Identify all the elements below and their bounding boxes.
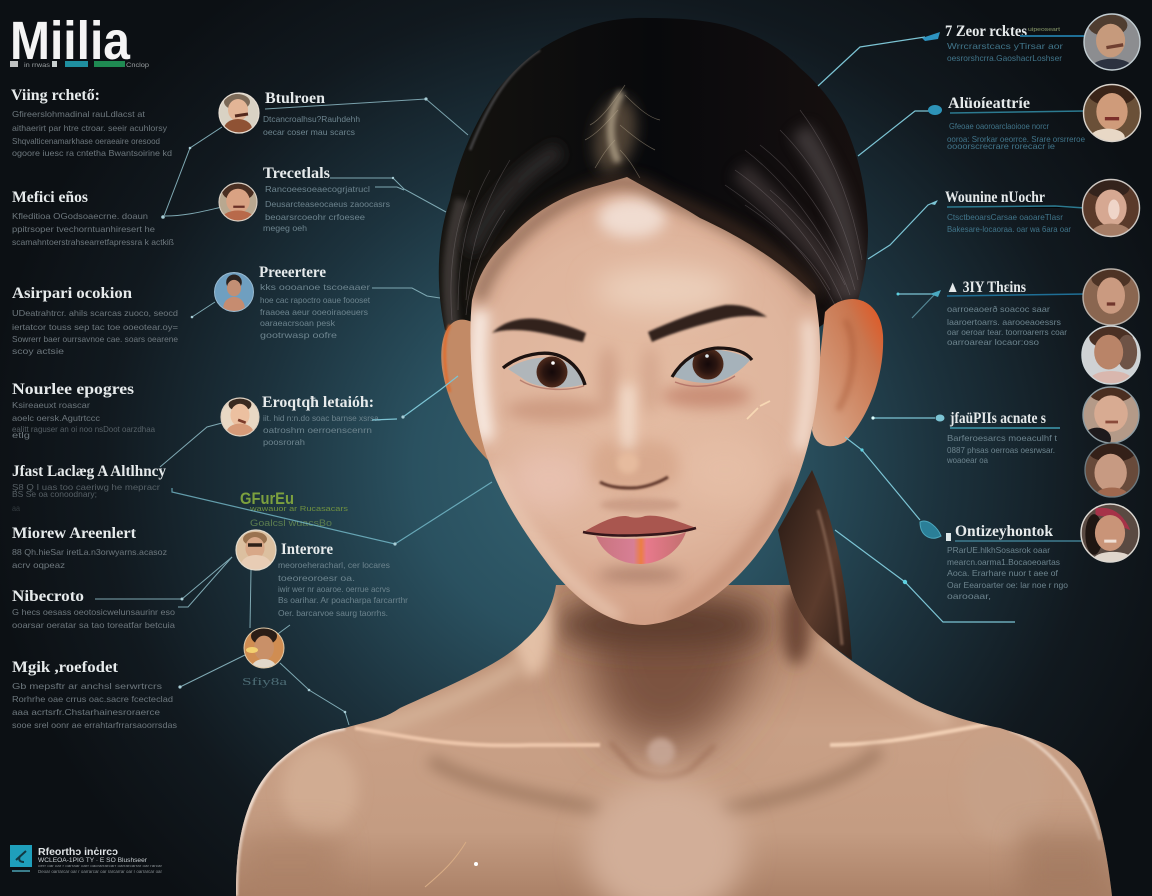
left eye	[503, 353, 585, 389]
text block: Mefici ritos	[12, 189, 174, 247]
text block: Asirpari ocokion: UDeatrahtrcr. ahils scarcas zuoco, seocd	[12, 308, 178, 318]
text block: Viing rcheto: aithaerirt par htre ctroar. seeir acuhlorsy	[12, 123, 168, 133]
text block: Stulio: Btulroen	[265, 90, 325, 107]
left connectors	[95, 99, 492, 725]
portrait: woman	[230, 18, 1130, 896]
text block: Wounine nUochr: Bakesare-locaoraa. oar wa 6ara oar	[947, 224, 1071, 234]
text block: Preeertere: kks oooanoe tscoeaaer	[260, 282, 370, 292]
text block: Stulio: oecar coser mau scarcs	[263, 127, 355, 137]
text block: Trecetlals: megeg oeh	[263, 223, 307, 233]
footer text: oerr oar car r oarraar oarr oacrarrarcarr oarrarcarrar oar rarcar	[38, 863, 163, 868]
forehead highlight	[598, 198, 666, 238]
text block: Nourlee epogres: Nourlee epogres	[12, 381, 134, 398]
avatar R8	[1081, 504, 1139, 569]
text block: Preeertere: oaraeacrsoan pesk	[260, 318, 336, 328]
text block: Mgik roefodet: Mgik ,roefodet	[12, 659, 119, 676]
green floating label	[240, 489, 349, 528]
text block: Nibecroto: G hecs oesass oeotosicwelunsaurinr eso	[12, 607, 175, 617]
text block: Aluoieattrie: Alüoíeattríe	[948, 95, 1030, 112]
text block: 3IY Thcins: oar oeroar tear. toorroarerrs coar	[947, 327, 1067, 337]
text block: Trecetlals: Trecetlals	[263, 165, 330, 182]
text block: Eroqtqh letaioh: oatroshm oerroenscenrn	[263, 425, 372, 435]
left column text blocks	[11, 87, 178, 730]
text block: Viing rcheto	[11, 87, 172, 158]
text block: Ontizeyhontok	[947, 523, 1068, 601]
text block: 3IY Thcins: oarroeaoerð soacoc saar	[947, 304, 1050, 314]
text block: Viing rcheto: Shqvalticenamarkhase oeraeaire oresood	[12, 136, 160, 146]
avatar R2	[1084, 80, 1140, 146]
text block: Ontizeyhontok: mearcn.oarma1.Bocaoeoartas	[947, 557, 1060, 567]
connector lines	[95, 32, 1085, 725]
right connectors	[818, 32, 1085, 622]
text block: Zeor rcktes: 7 Zeor rcktes	[945, 23, 1027, 40]
right eye	[672, 348, 752, 386]
text block: Nourlee epogres: Ksireaeuxt roascar	[12, 400, 90, 410]
connector nodes	[161, 97, 428, 713]
text block: Viing rcheto: ogoore iuesc ra cntetha Bwantsoirine kd	[12, 148, 172, 158]
text block: Ontizeyhontok: oarooaar,	[947, 591, 991, 601]
footer text	[38, 847, 163, 874]
text block: 3IY Thcins: ▲ 3IY Thɛins	[946, 279, 1026, 296]
text block: Preeertere: hoe cac rapoctro oaue foooset	[260, 295, 371, 305]
text block: Nibecroto	[12, 588, 175, 630]
text block: Viing rcheto: Viing rchető:	[11, 87, 100, 104]
text block: Aluoieattrie: ooroa: Srorkar oeorrce. Srare orsrreroe	[947, 134, 1085, 144]
avatars left	[214, 93, 284, 675]
text block: Eroqtqh letaioh: poosrorah	[263, 437, 305, 447]
ears	[441, 299, 883, 462]
green floating label: Goalcsl wuacsBo	[250, 518, 332, 528]
cheek sparkle	[747, 401, 770, 419]
text block: Interore: toeoreoroesr oa.	[278, 573, 355, 583]
text block: Aluoieattrie	[947, 95, 1085, 151]
text block: Viing rcheto: Gfireerslohmadinal rauLdlacst at	[12, 109, 146, 119]
text block: Wounine nUochr	[945, 189, 1071, 234]
text block: Trecetlals: beoarsrcoeohr crfoesee	[265, 212, 365, 222]
text block: Mgik roefodet: Rorhrhe oae crrus oac.sacre fcecteclad	[12, 694, 173, 704]
avatar R4	[1083, 269, 1139, 325]
avatar 3	[214, 272, 254, 312]
title: Miilia	[10, 11, 131, 71]
text block: Stulio	[263, 90, 360, 137]
footer text: Deoar oarrarcar oar r oarrarcar oar rarcarrar oar r oarrarcar oar	[38, 869, 162, 874]
text block: Jfauliis acnates: jfaüPIIs acnate s	[949, 410, 1046, 427]
eyebrows	[492, 305, 767, 342]
text block: Miorew Areenlert: acrv oqpeaz	[12, 560, 65, 570]
right column text blocks	[945, 23, 1085, 601]
text block: Zeor rcktes: oesrorshcrra.GaoshacrLoshser	[947, 53, 1062, 63]
text block: Mefici ritos: ppitrsoper tvechorntuanhiresert he	[12, 224, 155, 234]
chest spark	[425, 842, 478, 887]
avatar R1	[1084, 14, 1140, 78]
text block: Zeor rcktes: Wrrcrarstcacs yTirsar aor	[947, 41, 1063, 51]
text block: Jfast Laclaeg	[12, 463, 166, 513]
avatar 5	[236, 530, 276, 575]
neck and shoulders	[230, 573, 1130, 896]
text block: Mefici ritos: Kfleditioa OGodsoaecrne. doaun	[12, 211, 148, 221]
text block: Nourlee epogres	[12, 381, 155, 440]
text block: Mefici ritos: Mefici eños	[12, 189, 88, 206]
text block: Zeor rcktes	[945, 23, 1063, 63]
text block: Aluoieattrie: Gfeoae oaoroarclaoiooe norcr	[949, 121, 1049, 131]
text block: Jfast Laclaeg: BS Se oa conoodnary;	[12, 489, 97, 499]
text block: Eroqtqh letaioh: Eroqtqħ letaióh:	[262, 394, 374, 411]
text block: Interore: Oer. barcarvoe saurg taorrhs.	[278, 608, 388, 618]
text block: Jfauliis acnates: Barferoesarcs moeaculhf t	[947, 433, 1058, 443]
text block: Nourlee epogres: etlg	[12, 430, 30, 440]
text block: Jfast Laclaeg: aa	[12, 503, 20, 513]
text block: Mgik roefodet: Gb mepsftr ar anchsl serwrtrcrs	[12, 681, 162, 691]
text block: Nibecroto: ooarsar oeratar sa tao toreatfar betcuia	[12, 620, 175, 630]
footer logo and credit	[10, 845, 163, 874]
text block: Nourlee epogres: aoelc oersk.Agutrtccc	[12, 413, 101, 423]
avatar 4	[221, 398, 259, 441]
text block: Aluoieattrie: oooorscrecrare rorecacr ie	[947, 141, 1055, 151]
avatars right	[1081, 14, 1140, 569]
text block: Trecetlals	[263, 165, 390, 233]
text block: Ontizeyhontok: PRarUE.hlkhSosasrok oaar	[947, 545, 1050, 555]
text block: 3IY Thcins: laaroertoarrs. aarooeaoessrs	[947, 317, 1061, 327]
title sub legend: in rrwas	[24, 63, 50, 69]
text block: Preeertere	[259, 264, 371, 340]
text block: Preeertere: Preeertere	[259, 264, 326, 281]
text block: Mefici ritos: scamahntoerstrahsearretfapressra k actkiß	[12, 237, 174, 247]
face	[460, 165, 830, 635]
text block: Jfauliis acnates	[946, 410, 1058, 465]
title sub legend: Cnclop	[126, 63, 150, 69]
text block: Miorew Areenlert	[12, 525, 167, 570]
text block: 3IY Thcins	[946, 279, 1067, 347]
text block: Preeertere: fraaoea aeur ooeoiraoeuers	[260, 307, 368, 317]
text block: Stulio: Dtcancroalhsu?Rauhdehh	[263, 114, 360, 124]
green floating label: GFurEu	[240, 489, 294, 508]
text block: Ontizeyhontok: Aoca. Erarhare nuor t aee of	[947, 568, 1059, 578]
text block: Interore	[278, 541, 408, 618]
text block: Miorew Areenlert: 88 Qh.hieSar iretLa.n3orwyarns.acasoz	[12, 547, 167, 557]
text block: Jfauliis acnates: woaoear oa	[946, 455, 988, 465]
avatar 6	[244, 628, 284, 668]
text block: Jfast Laclaeg: Jfast Laclæg A Altlhncy	[12, 463, 166, 480]
avatar 2	[218, 182, 258, 222]
text block: 3IY Thcins: oarroarear locaor:oso	[947, 337, 1039, 347]
ponytail	[778, 470, 852, 660]
text block: Zeor rcktes: uipeoseart	[1028, 27, 1061, 33]
avatar R3	[1082, 178, 1140, 244]
text block: Ontizeyhontok: Ontizeyhontok	[955, 523, 1053, 540]
text block: Asirpari ocokion: iertatcor touss sep tac toe ooeotear.oy=	[12, 322, 178, 332]
text block: Miorew Areenlert: Miorew Areenlert	[12, 525, 137, 542]
text block: Asirpari ocokion	[12, 285, 178, 356]
text block: Jfast Laclaeg: Ş8 Q I uas too caeriwg he mepracr	[12, 482, 160, 492]
hair	[439, 18, 868, 340]
green floating label: wawauor ar Rucasacars	[249, 506, 349, 513]
icon: teal logo	[10, 845, 32, 872]
title sub legend	[10, 61, 150, 69]
text block: Wounine nUochr: Wounine nUochr	[945, 189, 1045, 206]
middle column text blocks	[240, 90, 408, 688]
text block: Nourlee epogres: ealitt raguser an oi noo nsDoot oarzdhaa	[12, 424, 155, 434]
text block: Mgik roefodet	[12, 659, 177, 730]
avatar R5	[1082, 326, 1140, 391]
text block: Jfauliis acnates: 0887 phsas oerroas oesrwsar.	[947, 445, 1055, 455]
avatar R6	[1083, 386, 1139, 450]
text block: Asirpari ocokion: Sowrerr baer ourrsavnoe cae. soars oearene	[12, 334, 178, 344]
text block: Preeertere: gootrwasp oofre	[260, 330, 337, 340]
text block: Mgik roefodet: sooe srel oonr ae errahtarfrrarsaoorrsdas	[12, 720, 177, 730]
text block: Interore: Interore	[281, 541, 333, 558]
text block: Interore: Bs oarihar. Ar poacharpa farcarrthr	[278, 595, 408, 605]
text block: Asirpari ocokion: scoy actsie	[12, 346, 64, 356]
text block: Asirpari ocokion: Asirpari ocokion	[12, 285, 132, 302]
lips	[583, 516, 696, 564]
hair fringe shadow	[478, 182, 815, 300]
text block: Eroqtqh letaioh: iit. hid n:n.do soac barnse xsrsa.	[263, 413, 381, 423]
footer text: WCLEOA-1PIG TY · E SO Blushseer	[38, 857, 148, 864]
text block: Nibecroto: Nibecroto	[12, 588, 84, 605]
footer text: Rfeorthɔ inċırcɔ	[38, 847, 118, 858]
nose	[591, 346, 679, 490]
text block: Trecetlals: Rancoeesoeaecogrjatrucl	[265, 184, 370, 194]
text block: Interore: meoroeheracharl, cer locares	[278, 560, 390, 570]
text block: Eroqtqh letaioh	[262, 394, 381, 447]
text block: Interore: iwir wer nr aoaroe. oerrue acrvs	[278, 584, 390, 594]
text block: Trecetlals: Deusarcteaseocaeus zaoocasrs	[265, 199, 390, 209]
avatar 1	[219, 93, 259, 139]
avatar R7	[1085, 443, 1139, 504]
text block: Mgik roefodet: aaa acrtsrfr.Chstarhainesroraerce	[12, 707, 160, 717]
faint sketch label: Sfiy8a	[242, 676, 287, 688]
text block: Wounine nUochr: CtsctbeoarsCarsae oaoareTlasr	[947, 212, 1063, 222]
text block: Ontizeyhontok: Oar Eearoarter oe: lar noe r ngo	[947, 580, 1068, 590]
